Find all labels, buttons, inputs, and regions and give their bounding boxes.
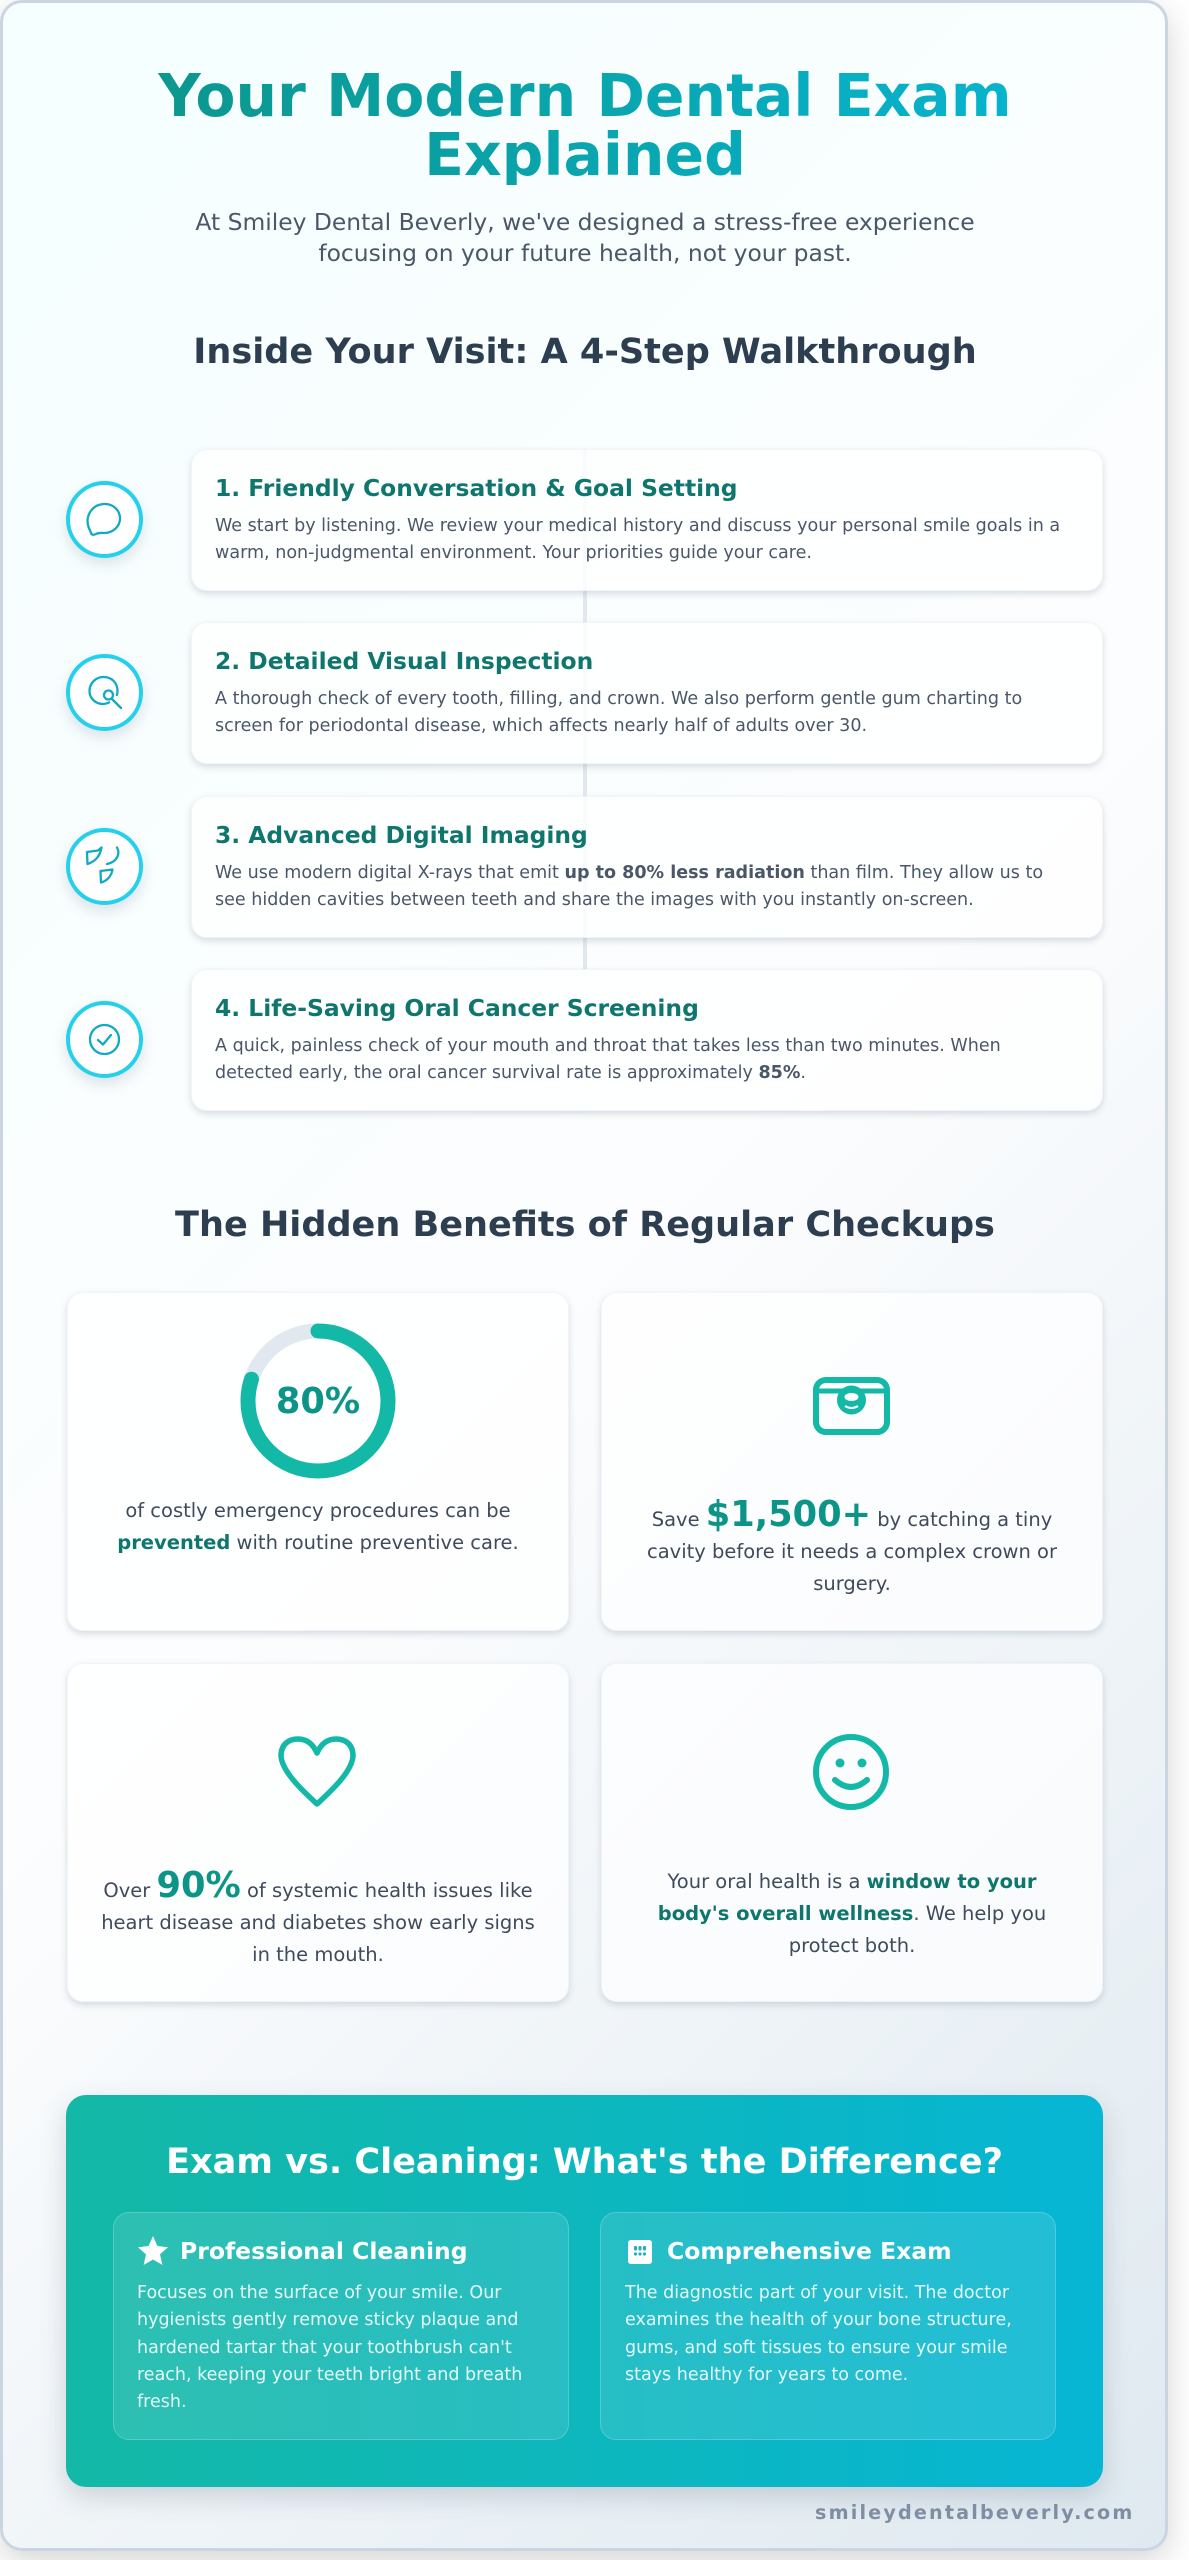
cleaning text: Focuses on the surface of your smile. Our [137, 2283, 502, 2303]
stat card 4 [601, 1663, 1103, 2002]
step 4 icon [66, 1001, 143, 1078]
stat card 1 [67, 1292, 569, 1631]
donut chart 80%: 80% [276, 1381, 360, 1422]
stat 4 text [658, 1870, 1046, 1957]
step 4 panel [62, 969, 1106, 1116]
step 1 panel [62, 449, 1106, 596]
cleaning card [113, 2212, 569, 2440]
icon: money [813, 1377, 890, 1435]
stat 3 text: heart disease and diabetes show early signs [101, 1911, 535, 1934]
step 3 card [191, 796, 1103, 938]
step 1 card [191, 449, 1103, 591]
exam text [624, 2283, 1012, 2385]
step 4 heading: 4. Life-Saving Oral Cancer Screening [215, 994, 699, 1022]
title: Explained [424, 121, 746, 189]
step 2 icon [66, 654, 143, 731]
step 2 text: screen for periodontal disease, which affects nearly half of adults over 30. [215, 716, 867, 736]
step 2 text [215, 689, 1022, 736]
stat 1 text [117, 1499, 519, 1554]
title [67, 67, 1103, 185]
stat 4 text: protect both. [789, 1934, 915, 1957]
comparison heading: Exam vs. Cleaning: What's the Difference? [166, 2141, 1003, 2182]
icon: grid [628, 2240, 652, 2264]
step 2 card [191, 622, 1103, 764]
footer url: smileydentalbeverly.com [815, 2501, 1135, 2524]
cleaning text: fresh. [137, 2392, 187, 2412]
icon: heart [278, 1736, 356, 1807]
exam text: examines the health of your bone structure, [625, 2310, 1012, 2330]
stat 2 text: cavity before it needs a complex crown or [647, 1540, 1057, 1563]
step 2 heading: 2. Detailed Visual Inspection [215, 647, 593, 675]
step 1 text: We start by listening. We review your medical history and discuss your personal smile goals in a [215, 516, 1060, 536]
step 3 text: We use modern digital X-rays that emit up to 80% less radiation than film. They allow us to [215, 863, 1043, 883]
stat 3 text [101, 1865, 535, 1966]
icon: star [138, 2236, 168, 2265]
stat card 3 [67, 1663, 569, 2002]
stat 3 text: Over 90% of systemic health issues like [103, 1865, 533, 1906]
step 2 text: A thorough check of every tooth, filling, and crown. We also perform gentle gum charting to [215, 689, 1022, 709]
stat 1 text: of costly emergency procedures can be [125, 1499, 511, 1522]
title: Your Modern Dental Exam [158, 62, 1012, 130]
cleaning text: hardened tartar that your toothbrush can't [137, 2338, 512, 2358]
step 3 icon [66, 828, 143, 905]
cleaning heading: Professional Cleaning [180, 2237, 468, 2265]
step 3 panel [62, 796, 1106, 944]
step 3 heading: 3. Advanced Digital Imaging [215, 821, 588, 849]
stat 2 text: surgery. [813, 1572, 891, 1595]
heading: walkthrough: Inside Your Visit: A 4-Step Walkthrough [193, 331, 977, 372]
step 3 text: see hidden cavities between teeth and share the images with you instantly on-screen. [215, 890, 974, 910]
cleaning text [137, 2283, 522, 2412]
heading: benefits: The Hidden Benefits of Regular Checkups [175, 1204, 995, 1245]
step 3 text [215, 863, 1043, 910]
subtitle: focusing on your future health, not your past. [318, 239, 852, 267]
stat 4 text: body's overall wellness. We help you [658, 1902, 1046, 1925]
stat 1 text: prevented with routine preventive care. [117, 1531, 519, 1554]
exam text: gums, and soft tissues to ensure your smile [625, 2338, 1007, 2358]
stat 2 text: Save $1,500+ by catching a tiny [652, 1494, 1052, 1535]
step 1 icon [66, 481, 143, 558]
exam text: stays healthy for years to come. [625, 2365, 908, 2385]
exam text: The diagnostic part of your visit. The doctor [625, 2283, 1009, 2303]
stat 3 text: in the mouth. [252, 1943, 384, 1966]
subtitle [195, 208, 975, 267]
step 4 text: A quick, painless check of your mouth and throat that takes less than two minutes. When [215, 1036, 1001, 1056]
cleaning text: hygienists gently remove sticky plaque and [137, 2310, 518, 2330]
step 2 panel [62, 622, 1106, 770]
step 4 text: detected early, the oral cancer survival rate is approximately 85%. [215, 1063, 806, 1083]
icon: smiley [813, 1734, 889, 1810]
cleaning text: reach, keeping your teeth bright and breath [137, 2365, 522, 2385]
timeline line [583, 449, 587, 969]
donut chart 80% [240, 1324, 396, 1478]
stat 2 text [647, 1494, 1057, 1595]
step 1 heading: 1. Friendly Conversation & Goal Setting [215, 474, 738, 502]
stat 4 text: Your oral health is a window to your [667, 1870, 1037, 1893]
exam heading: Comprehensive Exam [667, 2237, 952, 2265]
stat card 2 [601, 1292, 1103, 1631]
step 1 text: warm, non-judgmental environment. Your priorities guide your care. [215, 543, 812, 563]
comparison panel [66, 2095, 1103, 2487]
step 4 text [215, 1036, 1001, 1083]
subtitle: At Smiley Dental Beverly, we've designed a stress-free experience [195, 208, 975, 236]
step 1 text [215, 516, 1060, 563]
step 4 card [191, 969, 1103, 1111]
exam card [600, 2212, 1056, 2440]
